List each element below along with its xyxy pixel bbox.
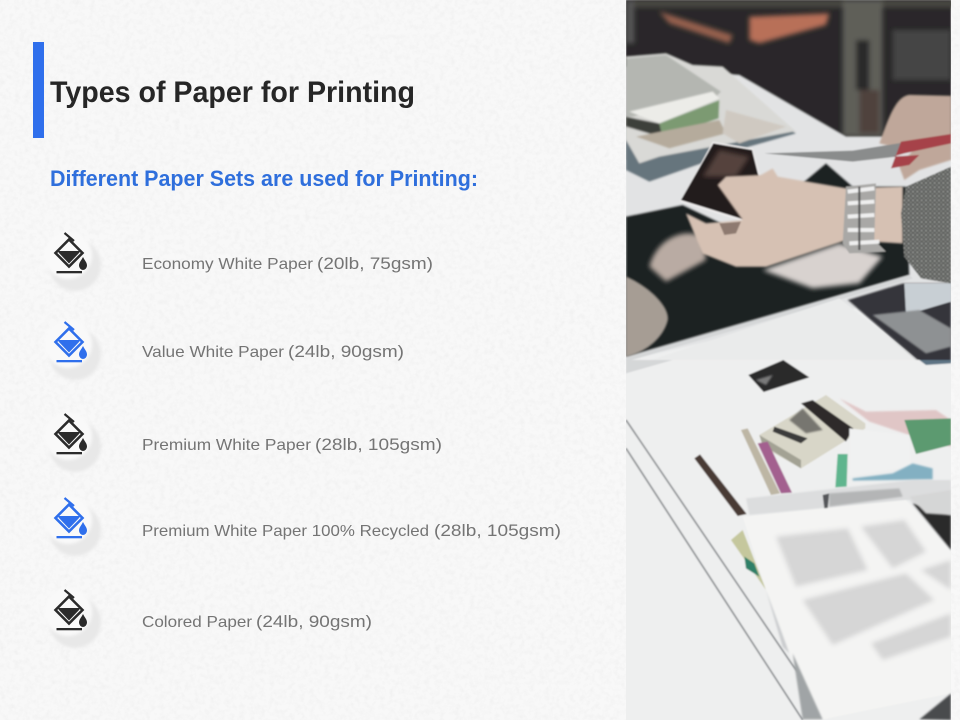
scissor blade bbox=[764, 143, 903, 162]
list item: premium recycled paper: (28lb, 105gsm) bbox=[434, 521, 561, 540]
bookmark bbox=[731, 530, 766, 590]
list item: colored paper: Colored Paper bbox=[142, 614, 253, 631]
left hand and arm bbox=[686, 168, 903, 267]
booklet text blocks bbox=[776, 520, 951, 660]
list item: economy white paper: Economy White Paper bbox=[142, 256, 314, 273]
list item: value white paper: Value White Paper bbox=[142, 344, 285, 361]
green marker bbox=[835, 454, 848, 487]
white desk sheet bbox=[626, 275, 913, 362]
magenta marker bbox=[758, 442, 792, 493]
photo bottom half, drawn in 3x coordinates bbox=[626, 360, 951, 720]
icon: paint bucket blue bbox=[44, 496, 101, 556]
list item: colored paper bbox=[44, 588, 372, 648]
icon: paint bucket black bbox=[44, 231, 101, 291]
list item: value white paper bbox=[44, 320, 404, 380]
sweater sleeve bbox=[901, 167, 951, 283]
scissor handle bbox=[891, 134, 951, 168]
right hand bbox=[879, 95, 951, 180]
table surface bbox=[626, 67, 951, 360]
diagonal page lines bbox=[626, 420, 803, 720]
list item: premium recycled paper bbox=[44, 496, 561, 556]
icon: paint bucket black bbox=[44, 412, 101, 472]
held photo bbox=[680, 142, 761, 222]
list item: premium recycled paper: Premium White Paper 100% Recycled bbox=[142, 523, 429, 540]
small dark print bbox=[748, 360, 809, 392]
brown marker bbox=[694, 454, 747, 516]
note pad bbox=[759, 395, 865, 468]
icon: paint bucket blue bbox=[44, 320, 101, 380]
list item: value white paper: (24lb, 90gsm) bbox=[288, 342, 404, 361]
dark corner bbox=[919, 693, 951, 720]
photo: hands cutting prints on a desk bbox=[626, 0, 959, 720]
icon: paint bucket black bbox=[44, 588, 101, 648]
open booklet bbox=[824, 500, 905, 510]
watch bbox=[843, 183, 886, 253]
right corner dark strip bbox=[848, 283, 951, 362]
title: Types of Paper for Printing bbox=[50, 76, 415, 109]
pencil bbox=[741, 428, 780, 495]
list item: economy white paper bbox=[44, 231, 433, 291]
torn coloured paper bbox=[839, 398, 951, 447]
accent bar bbox=[33, 42, 44, 138]
list item: premium white paper: Premium White Paper bbox=[142, 437, 312, 454]
binder and dark object bbox=[746, 480, 951, 515]
list item: colored paper: (24lb, 90gsm) bbox=[256, 612, 372, 631]
photo top half, drawn in 3x coordinates bbox=[626, 0, 959, 362]
list item: premium white paper: (28lb, 105gsm) bbox=[315, 435, 442, 454]
stack of prints bbox=[626, 53, 796, 182]
large dark print bbox=[626, 163, 909, 357]
list item: economy white paper: (20lb, 75gsm) bbox=[317, 254, 433, 273]
list item: premium white paper bbox=[44, 412, 442, 472]
subheading: Different Paper Sets are used for Printing: bbox=[50, 166, 478, 191]
